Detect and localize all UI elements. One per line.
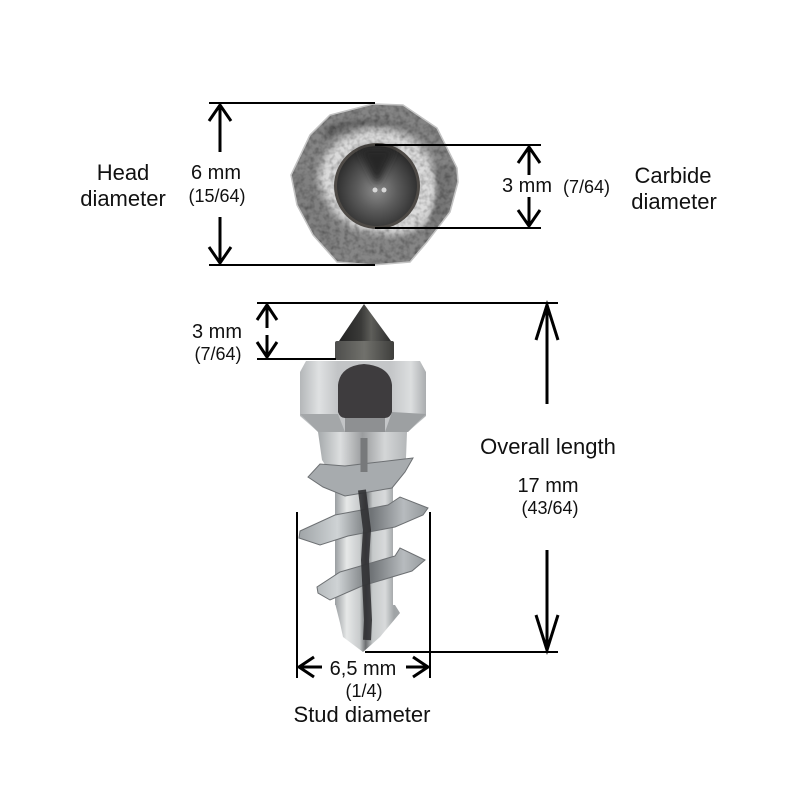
label: carbide diameter: Carbide xyxy=(634,163,712,188)
carbide diameter dimension: (7/64) xyxy=(563,177,610,197)
stud diameter dimension: 6,5 mm xyxy=(330,658,396,680)
overall length dimension: Overall length xyxy=(480,434,616,459)
photo: stud side view xyxy=(299,304,428,652)
overall length dimension: 17 mm xyxy=(517,475,579,497)
carbide tip xyxy=(334,143,420,229)
stud diameter dimension xyxy=(294,512,430,727)
carbide protrusion dimension xyxy=(192,303,558,364)
label: head diameter: Head xyxy=(97,160,149,185)
overall length dimension xyxy=(365,305,616,652)
carbide diameter dimension xyxy=(375,145,610,228)
stud diameter dimension: Stud diameter xyxy=(294,702,430,727)
head diameter dimension xyxy=(188,103,375,265)
head diameter dimension: 6 mm xyxy=(191,162,241,184)
carbide protrusion dimension: 3 mm xyxy=(192,321,242,343)
overall length dimension: (43/64) xyxy=(521,498,579,518)
photo: stud head top view xyxy=(290,103,459,266)
carbide pin collar xyxy=(335,341,394,360)
carbide pin cone xyxy=(339,304,391,341)
head diameter dimension: (15/64) xyxy=(188,186,246,206)
carbide protrusion dimension: (7/64) xyxy=(194,344,242,364)
stud diameter dimension: (1/4) xyxy=(345,681,383,701)
label: carbide diameter: diameter xyxy=(631,189,717,214)
carbide diameter dimension: 3 mm xyxy=(502,175,552,197)
label: head diameter: diameter xyxy=(80,186,166,211)
threaded shaft xyxy=(299,432,428,652)
stud specification infographic xyxy=(81,102,716,722)
hex head xyxy=(300,361,426,432)
